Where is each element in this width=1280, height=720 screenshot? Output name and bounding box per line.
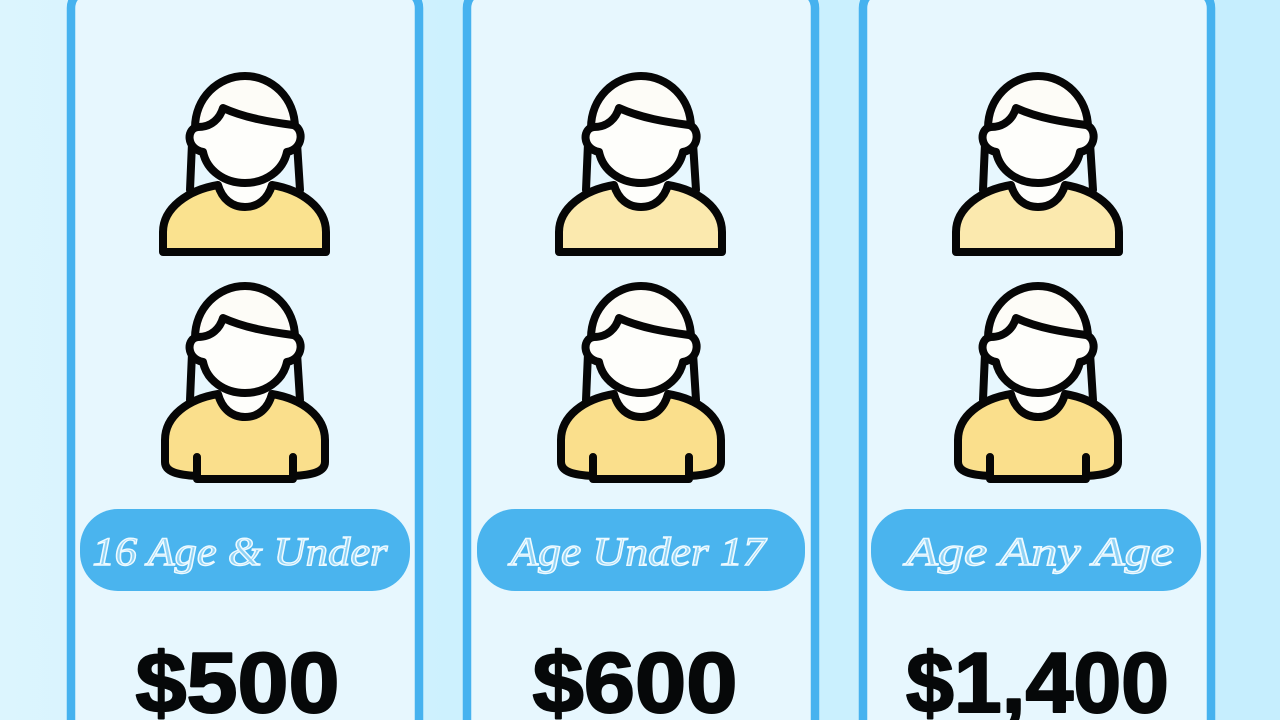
card frame: [863, 0, 1211, 720]
panel: under 17: [467, 0, 815, 720]
card frame: [467, 0, 815, 720]
icon: person, upper: [163, 76, 326, 252]
panel: 16 and under: [71, 0, 419, 720]
age label pill: [80, 509, 410, 591]
icon: person, upper: [956, 76, 1119, 252]
age label pill: [477, 509, 805, 591]
card frame: [71, 0, 419, 720]
age label pill: [871, 509, 1201, 591]
icon: person, upper: [559, 76, 722, 252]
icon: person, lower: [561, 286, 721, 479]
panel: any age: [863, 0, 1211, 720]
icon: person, lower: [165, 286, 325, 479]
age label pill: Age Under 17: [507, 529, 768, 574]
age label pill: Age Any Age: [902, 529, 1174, 574]
icon: person, lower: [958, 286, 1118, 479]
age label pill: 16 Age & Under: [92, 529, 388, 574]
